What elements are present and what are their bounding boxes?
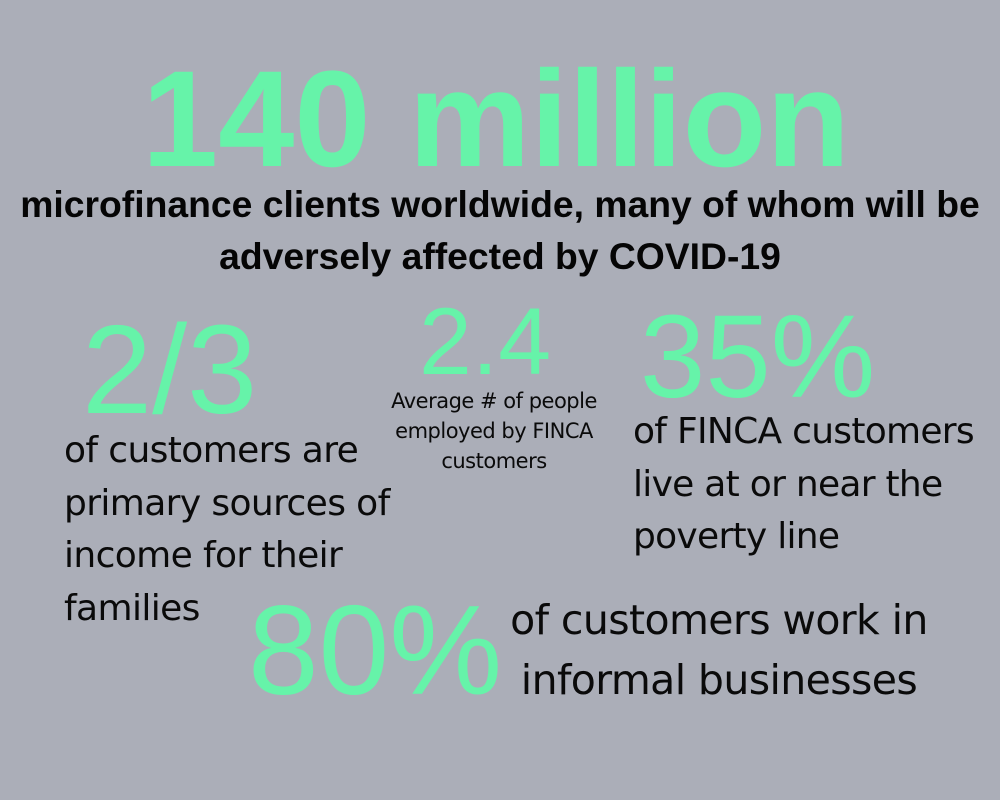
stat: 35% description	[633, 411, 974, 557]
stat: 35% description: of FINCA customers	[633, 411, 974, 452]
stat: 35% description: poverty line	[633, 516, 839, 557]
subtitle: adversely affected by COVID-19	[219, 235, 781, 277]
stat: 80% description: informal businesses	[521, 656, 917, 704]
stat: 2.4 number: 2.4	[419, 289, 551, 395]
stat: 2.4 description: employed by FINCA	[395, 419, 593, 443]
stat: 80% description: of customers work in	[510, 596, 928, 644]
title: 140 million: 140 million	[142, 43, 850, 196]
stat: 80% description	[510, 596, 928, 704]
stat: 2/3 description: primary sources of	[64, 482, 390, 524]
subtitle	[20, 183, 980, 277]
stat: 2/3 description: of customers are	[64, 430, 358, 471]
subtitle: microfinance clients worldwide, many of whom will be	[20, 183, 980, 225]
stat: 2.4 description: Average # of people	[391, 389, 597, 413]
stat: 2.4 description: customers	[441, 449, 547, 473]
stat: 35% description: live at or near the	[633, 464, 942, 504]
stat: 80% number: 80%	[248, 579, 502, 721]
stat: 2/3 description: families	[64, 588, 200, 628]
stat: 35% number: 35%	[640, 291, 875, 422]
stat: 2/3 description: income for their	[64, 535, 342, 576]
stat: 2/3 description	[64, 430, 391, 628]
stat: 2.4 description	[391, 389, 597, 473]
stat: 2/3 number: 2/3	[82, 299, 257, 440]
